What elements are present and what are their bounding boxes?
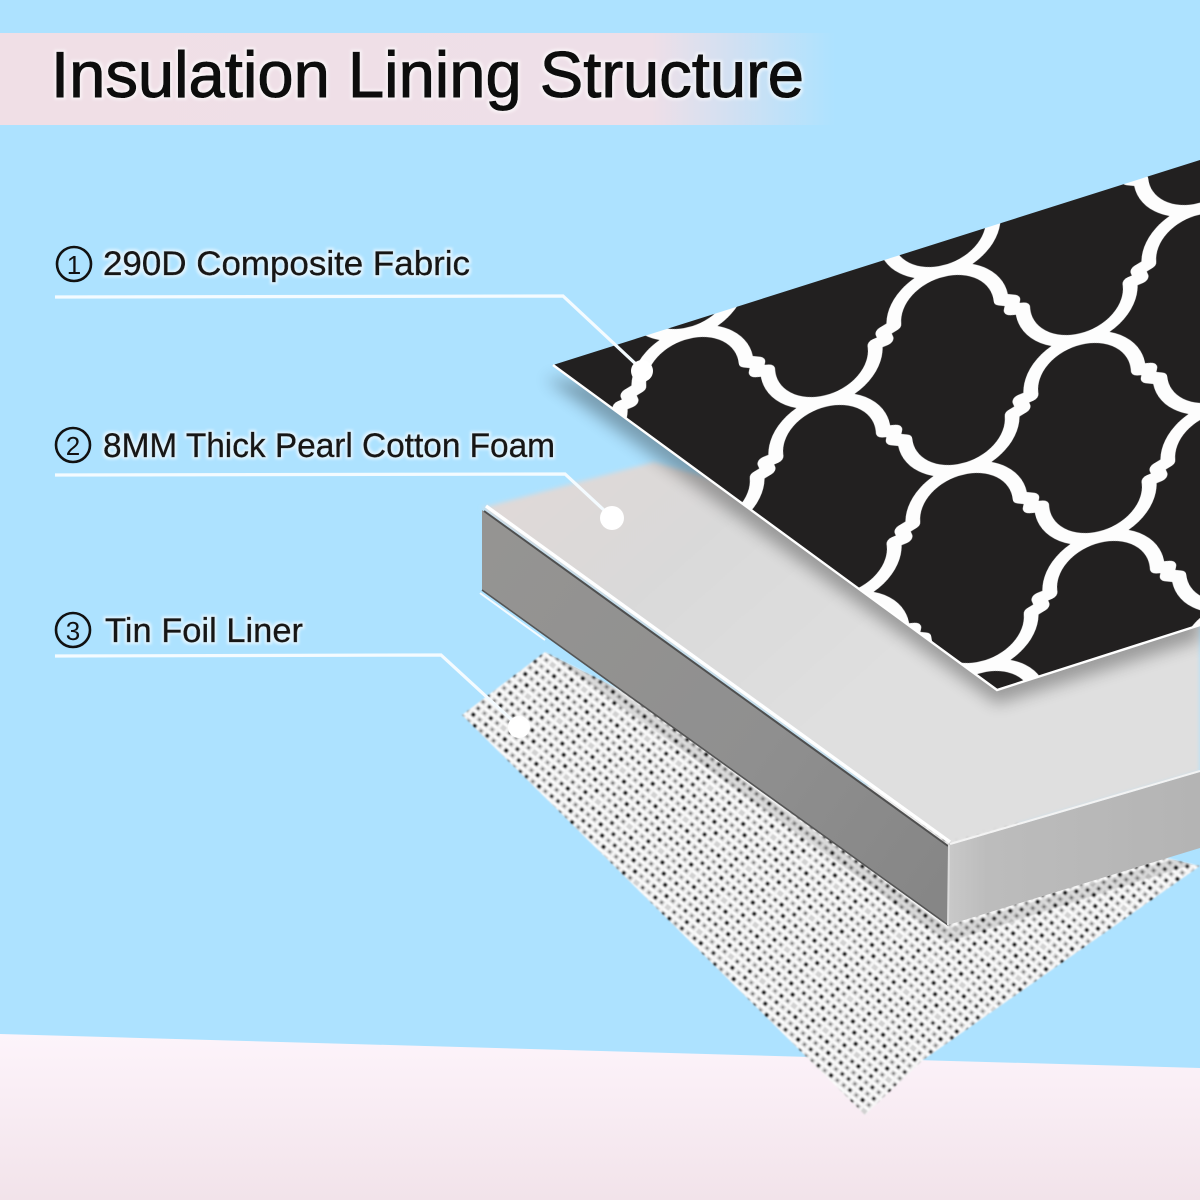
foam edge highlights [480,506,1200,925]
layer 2: pearl cotton foam [480,462,1200,925]
label 1: 290D Composite Fabric [57,245,470,283]
leader line 2 with dot [55,474,624,530]
shadow cast by the fabric [545,378,1200,704]
layer 1: composite fabric with quatrefoil pattern [553,160,1200,690]
label 2: 8MM Thick Pearl Cotton Foam [56,427,555,465]
label 3: Tin Foil Liner [56,612,303,650]
fabric white edge [553,365,1200,690]
label text 3: Tin Foil Liner [105,612,303,650]
leader line 1 with dot [55,296,653,382]
number badge 3: 3 [66,616,80,646]
number badge 2: 2 [66,431,80,461]
layer 3: tin foil liner [462,652,1200,1115]
label text 1: 290D Composite Fabric [103,245,470,283]
label text 2: 8MM Thick Pearl Cotton Foam [103,427,555,465]
foam left side face [482,510,950,925]
shadow of foam on foil [547,653,1193,942]
title: Insulation Lining Structure [51,38,804,111]
number badge 2 [56,428,90,462]
number badge 3 [56,613,90,647]
leader line 3 with dot [55,655,530,738]
header band [0,33,835,125]
number badge 1 [57,247,91,281]
number badge 1: 1 [67,250,81,280]
foam right side face [948,772,1200,925]
background: pink floor [0,1034,1200,1200]
foam top face [482,462,1200,845]
